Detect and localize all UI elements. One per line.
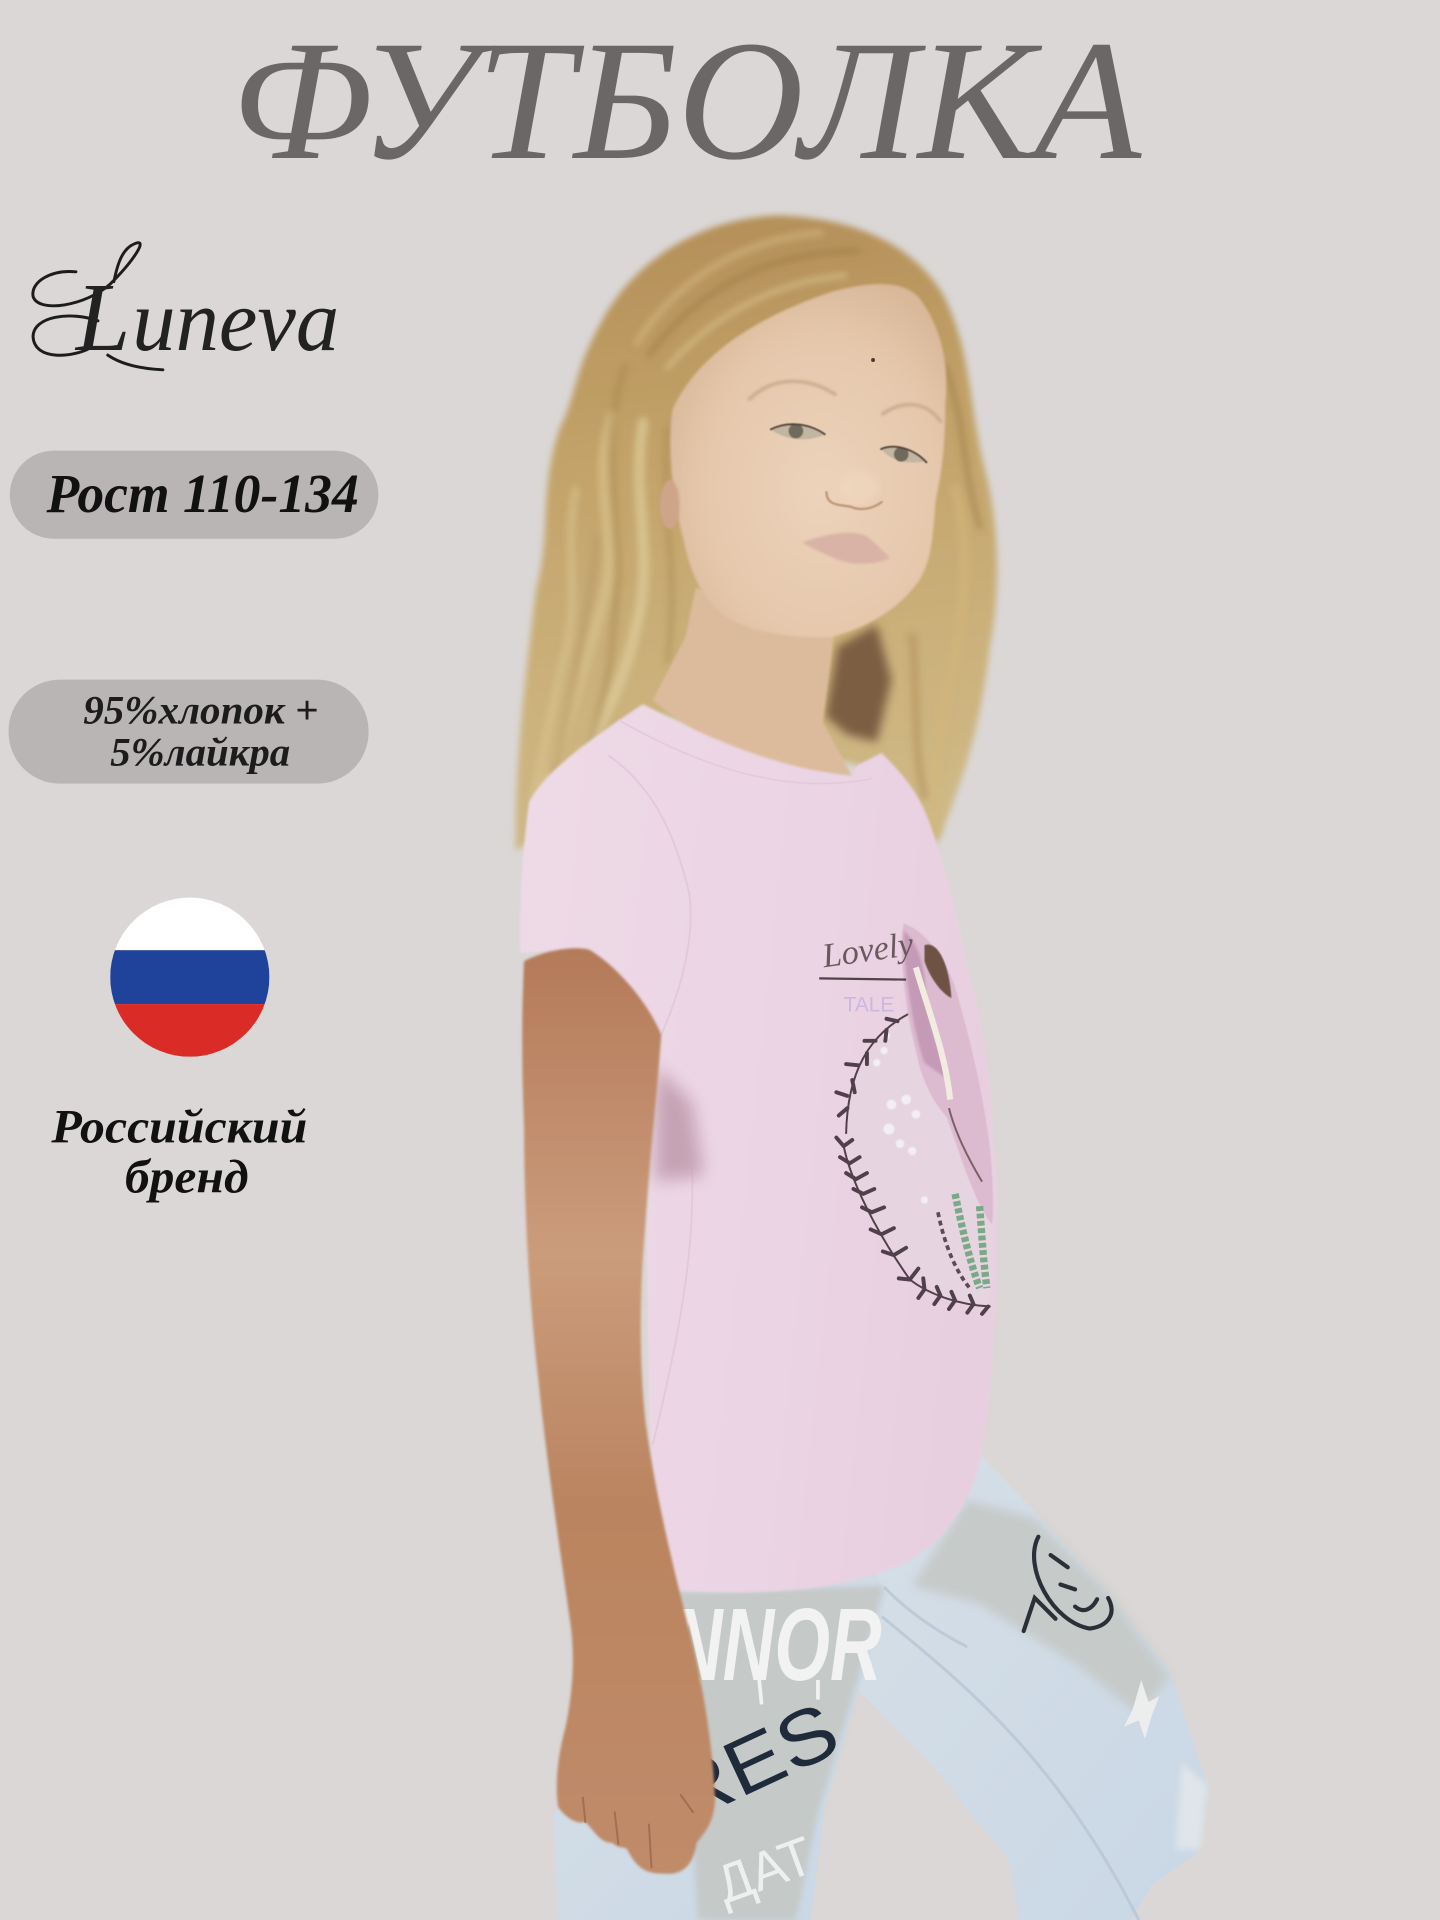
brand logo: Luneva: L (74, 264, 130, 372)
front leg (858, 1455, 1207, 1920)
collar rib (618, 720, 872, 784)
star doodle (1124, 1680, 1160, 1739)
photo: girl wearing t-shirt (515, 216, 1207, 1920)
finger creases (583, 1795, 693, 1867)
t-shirt (520, 704, 997, 1592)
badge: height range (10, 451, 378, 539)
mouth (802, 533, 890, 564)
badge: height range: Рост 110-134 (46, 463, 359, 524)
icon: Russian flag (110, 898, 269, 1057)
graffiti drips (698, 1678, 818, 1714)
caption: Russian brand: Российский (50, 1100, 307, 1153)
brand logo: Luneva (33, 243, 339, 372)
t-shirt print: TALE (844, 993, 894, 1016)
caption: Russian brand (50, 1100, 307, 1204)
graffiti lettering: NNOR (671, 1587, 882, 1702)
ear (660, 480, 680, 529)
inner sequins (847, 1014, 994, 1307)
badge: fabric composition: 95%хлопок + (83, 688, 318, 733)
shirt fold shadow (655, 1065, 704, 1182)
fairy figure (902, 923, 993, 1224)
smiley doodle (1024, 1537, 1112, 1631)
hair (515, 216, 997, 851)
badge: fabric composition: 5%лайкра (110, 729, 290, 774)
brand logo: Luneva: uneva (132, 272, 339, 370)
plant (955, 1194, 987, 1288)
side seam (653, 1163, 692, 1445)
badge: fabric composition (9, 680, 369, 784)
face (660, 284, 946, 637)
wreath (836, 1014, 991, 1314)
seams (882, 1587, 1139, 1920)
print lettering: Lovely (819, 925, 916, 975)
jeans (553, 1455, 1207, 1920)
title: ФУТБОЛКА (231, 6, 1143, 196)
graffiti area (671, 1586, 884, 1920)
caption: Russian brand: бренд (125, 1151, 249, 1204)
back leg (553, 1576, 887, 1920)
t-shirt print (819, 923, 994, 1314)
eyes (770, 424, 927, 463)
sleeve seam (609, 756, 691, 1035)
jeans: RES (653, 1685, 851, 1840)
nose (840, 471, 879, 503)
eyebrows (749, 381, 940, 421)
neck (653, 588, 852, 776)
arm (522, 948, 715, 1874)
knee rip (1176, 1763, 1207, 1849)
mole (871, 358, 875, 362)
jeans: ДАТ (708, 1825, 821, 1915)
